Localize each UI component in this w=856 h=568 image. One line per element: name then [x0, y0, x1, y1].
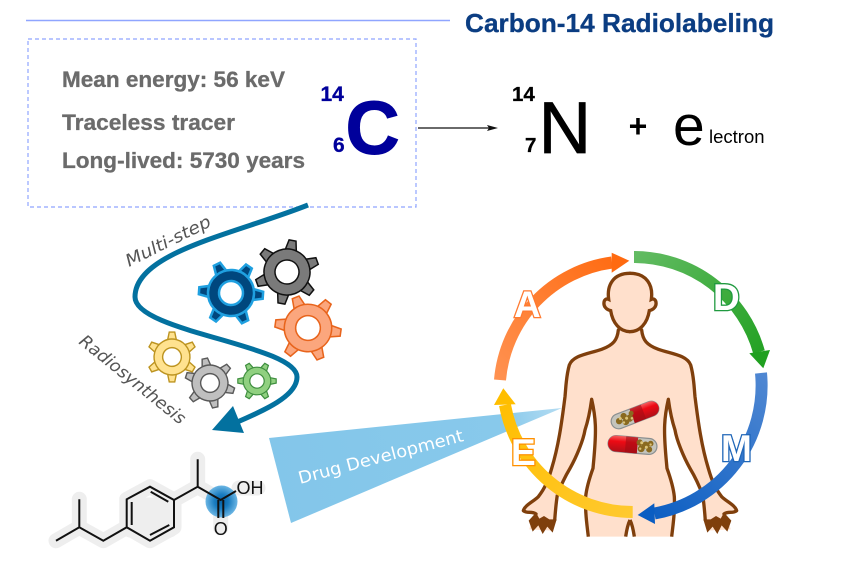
arrow: decay — [418, 125, 498, 131]
gear: green — [238, 363, 276, 399]
gear: blue — [197, 260, 265, 326]
nitrogen-14 symbol: 7 — [525, 134, 536, 157]
arrow: distribution — [634, 257, 770, 368]
electron label: e — [673, 94, 705, 158]
gear: orange — [271, 292, 345, 364]
ADME cycle — [494, 253, 770, 524]
wedge label: Drug Development — [296, 426, 466, 489]
property: mean energy: Mean energy: 56 keV — [62, 67, 285, 92]
gear: light grey — [179, 353, 241, 413]
atom: OH: OH — [236, 478, 264, 498]
capsule upper — [609, 399, 661, 431]
letter M: M — [721, 428, 752, 469]
nitrogen-14 symbol: N — [538, 88, 591, 169]
nitrogen-14 symbol — [512, 83, 591, 169]
letter E: E — [511, 432, 536, 473]
atom: O: O — [214, 519, 228, 539]
panel: carbon-14 properties — [28, 39, 416, 207]
arrow: excretion — [494, 388, 633, 512]
labelled carbon glow — [206, 486, 238, 518]
arrow: multi-step S curve — [135, 205, 308, 433]
carbon-14 symbol: 14 — [320, 83, 344, 106]
arrow: metabolism — [638, 373, 762, 524]
molecule halo — [56, 459, 258, 541]
label: multi-step: Multi-step — [122, 212, 215, 271]
letter D: D — [713, 277, 740, 318]
drug development wedge — [269, 408, 562, 523]
title: Carbon-14 Radiolabeling — [465, 8, 774, 38]
carbon-14 symbol: 6 — [333, 134, 345, 157]
capsule lower — [607, 435, 658, 455]
human body figure — [523, 273, 737, 537]
title rule — [26, 20, 450, 22]
gears — [138, 232, 345, 413]
electron label — [673, 94, 765, 158]
panel border — [28, 39, 416, 207]
electron label: lectron — [709, 126, 765, 147]
carbon-14 symbol — [320, 83, 400, 170]
gear: dark grey — [246, 232, 328, 312]
bonds — [56, 459, 236, 541]
letter A: A — [514, 284, 541, 325]
property: half life: Long-lived: 5730 years — [62, 148, 305, 173]
property: traceless tracer: Traceless tracer — [62, 110, 235, 135]
nitrogen-14 symbol: 14 — [512, 83, 535, 106]
plus sign: + — [629, 108, 647, 144]
gear: yellow — [138, 324, 206, 390]
carbon-14 symbol: C — [346, 86, 400, 170]
label: radiosynthesis: Radiosynthesis — [75, 331, 190, 429]
molecule: ibuprofen — [56, 459, 264, 541]
arrow: absorption — [500, 253, 629, 380]
